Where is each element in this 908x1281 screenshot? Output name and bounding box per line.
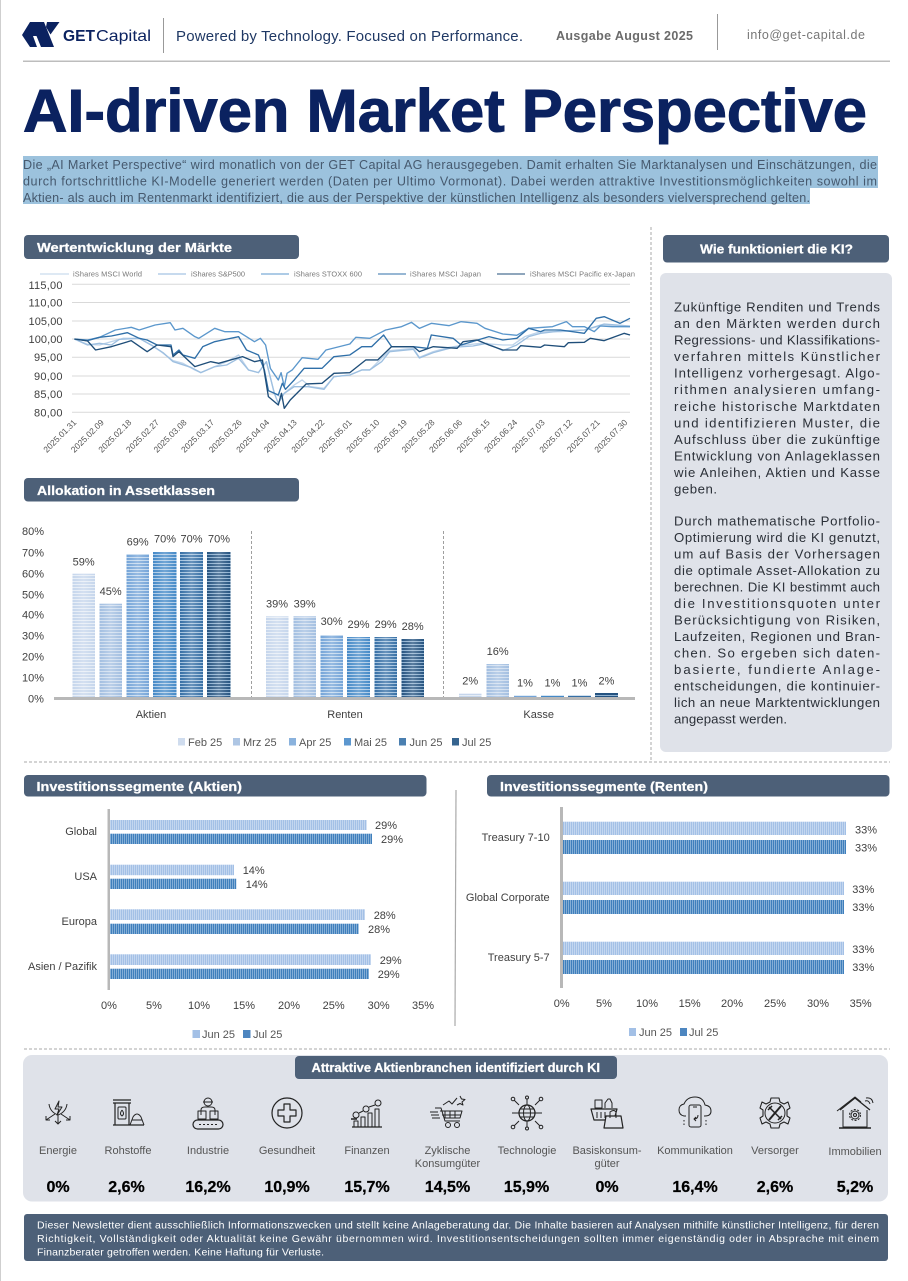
x axis ticks: 15% [233,1000,255,1012]
y axis percentages: 80% [22,526,44,538]
data labels: 1% [572,678,588,690]
y axis labels: 90,00 [34,371,62,383]
x axis ticks: 35% [412,1000,434,1012]
y axis percentages: 40% [22,609,44,621]
sector labels: Energie [39,1145,77,1157]
x axis ticks: 5% [146,1000,162,1012]
x axis dates: 2025.04.04 [234,417,271,454]
icon: cyclical consumer goods [430,1096,465,1128]
series: Jun 25 [563,822,846,955]
x axis dates: 2025.02.27 [124,417,161,454]
heading: Wie funktioniert die KI?: Wie funktioniert die KI? [700,242,853,256]
data labels [73,534,615,690]
chart legend: Mrz 25 [243,737,277,749]
paragraph 2: Optimierung wird die KI genutzt, [674,530,880,545]
sector labels: Technologie [498,1145,556,1157]
sector labels: Finanzen [344,1145,390,1157]
category labels [28,826,98,973]
icon: communication [679,1097,711,1127]
paragraph 2 [674,514,881,726]
series: Jul 25 [207,552,618,697]
data labels: 14% [243,865,265,877]
data labels: 14% [246,879,268,891]
sector percentages [46,1179,873,1196]
panel heading [295,1056,617,1079]
data labels: 2% [599,676,615,688]
panel heading: Attraktive Aktienbranchen identifiziert durch KI [312,1061,600,1075]
bar chart: bond segments [466,807,877,1039]
chart legend: Jul 25 [689,1027,718,1039]
bar chart: equity segments [28,809,434,1041]
heading: Investitionssegmente (Renten): Investitionssegmente (Renten) [500,779,708,794]
chart legend: Apr 25 [299,737,331,749]
x axis ticks: 20% [278,1000,300,1012]
data labels: 28% [374,910,396,922]
disclaimer: Finanzberater getroffen werden. Keine Haftung für Verluste. [37,1246,324,1258]
chart legend: Jun 25 [639,1027,672,1039]
x axis dates: 2025.04.13 [262,417,299,454]
sector labels: Industrie [187,1145,229,1157]
x axis ticks: 25% [323,1000,345,1012]
sector percentages: 0% [595,1179,619,1196]
sector percentages: 2,6% [108,1179,145,1196]
category labels: Kasse [523,709,554,721]
paragraph 1: an den Märkten werden durch [674,316,880,331]
series: Jul 25 [563,840,846,974]
x axis ticks: 25% [764,998,786,1010]
sector labels: Kommunikation [657,1145,733,1157]
paragraph 1: geben. [674,482,717,496]
contact e-mail: info@get-capital.de [747,28,865,42]
logo [22,22,151,47]
chart legend: iShares S&P500 [191,270,245,278]
logo: GET [63,28,95,45]
paragraph 1: reiche historische Marktdaten [674,399,880,414]
data labels: 29% [380,955,402,967]
data labels: 59% [73,556,95,568]
icon: health [272,1098,302,1128]
x axis dates: 2025.07.21 [565,417,602,454]
data labels: 16% [487,646,509,658]
heading: Investitionssegmente (Renten) [487,775,890,796]
x axis ticks: 0% [554,998,570,1010]
data labels: 39% [266,598,288,610]
y axis percentages: 0% [28,693,44,705]
sector labels: Immobilien [828,1146,882,1158]
x axis ticks: 30% [368,1000,390,1012]
sector percentages: 10,9% [264,1179,310,1196]
y axis percentages: 50% [22,589,44,601]
chart legend [40,270,635,278]
data labels: 2% [462,676,478,688]
heading: Investitionssegmente (Aktien) [24,775,426,796]
heading: Allokation in Assetklassen: Allokation in Assetklassen [37,483,215,498]
paragraph 2: berechnen. Die KI bestimmt auch [674,580,880,594]
icon: technology [511,1096,543,1130]
x axis ticks [554,998,872,1010]
data labels: 33% [852,902,875,914]
paragraph 2: basierte, fundierte Anlage- [674,662,880,677]
sector percentages: 15,7% [344,1179,390,1196]
bar chart: asset allocation [22,526,635,749]
tagline: Powered by Technology. Focused on Performance. [176,28,523,45]
disclaimer: Dieser Newsletter dient ausschließlich Informationszwecken und stellt keine Anlageberatung dar. Die Inhalte basieren auf Analysen mithilfe künstlicher Intelligenz, für deren [37,1220,879,1232]
icon: finance [351,1100,382,1127]
y axis percentages: 70% [22,547,44,559]
x axis ticks: 30% [807,998,829,1010]
sector labels: Gesundheit [259,1145,315,1157]
data labels: 70% [154,534,176,546]
sector labels: güter [594,1158,620,1170]
data labels: 70% [208,534,230,546]
y axis percentages [22,526,44,705]
sector percentages: 16,2% [185,1179,231,1196]
y axis percentages: 20% [22,651,44,663]
data labels: 28% [368,924,390,936]
data labels: 29% [378,969,400,981]
paragraph 2: um auf Basis der Vorhersagen [674,546,880,562]
category labels: USA [74,871,98,883]
chart legend: Jul 25 [462,737,491,749]
sector percentages: 2,6% [757,1179,793,1196]
y axis labels: 95,00 [34,352,62,364]
sector percentages: 16,4% [672,1179,718,1196]
category labels: Renten [327,709,363,721]
intro text [23,156,878,205]
x axis dates: 2025.07.03 [510,417,547,454]
x axis dates: 2025.06.15 [455,417,492,454]
category labels: Global [65,826,97,838]
data labels: 33% [852,884,875,896]
data labels: 29% [347,619,370,631]
data labels: 33% [852,962,875,974]
sector labels: Zyklische [425,1145,470,1157]
y axis percentages: 10% [22,672,44,684]
category labels: Treasury 5-7 [488,952,550,964]
chart legend: iShares MSCI Japan [410,270,481,278]
x axis dates: 2025.05.28 [399,417,437,454]
data labels [243,820,403,981]
panel: attractive sectors [23,1055,888,1202]
sector percentages: 0% [46,1179,70,1196]
heading: Investitionssegmente (Aktien): Investitionssegmente (Aktien) [36,779,242,794]
paragraph 1: Entwicklung von Anlageklassen [674,448,880,463]
x axis ticks: 20% [721,998,743,1010]
data labels: 30% [321,616,343,628]
header [22,14,890,62]
chart legend: Mai 25 [354,737,387,749]
sector labels: Versorger [751,1145,799,1157]
category labels: Europa [62,916,98,928]
series: Feb 25 [72,574,482,697]
chart legend: Feb 25 [188,737,222,749]
data labels: 29% [375,619,397,631]
icon: raw materials [113,1100,144,1125]
data labels: 70% [180,534,203,546]
heading: Wertentwicklung der Märkte: Wertentwicklung der Märkte [37,240,232,255]
y axis labels: 115,00 [28,280,62,292]
chart legend: iShares STOXX 600 [294,270,362,278]
data labels [852,824,877,974]
y axis labels: 100,00 [28,334,62,346]
heading: Wertentwicklung der Märkte [24,235,299,259]
intro text: durch fortschrittliche KI-Modelle generiert werden (Daten per Ultimo Vormonat). Dabei werden attraktive Investitionsmöglichkeiten sowohl im [23,174,877,188]
data labels: 28% [402,621,424,633]
category labels: Global Corporate [466,892,550,904]
y axis labels: 80,00 [34,408,62,420]
intro text: Die „AI Market Perspective“ wird monatlich von der GET Capital AG herausgegeben. Damit erhalten Sie Marktanalysen und Einschätzungen, die [23,158,877,172]
data lines [74,317,630,408]
chart legend: Jul 25 [253,1029,282,1041]
sector percentages: 5,2% [837,1179,873,1196]
data labels: 39% [294,598,316,610]
paragraph 2: Laufzeiten, Regionen und Bran- [674,629,880,644]
sector labels: Basiskonsum- [572,1145,642,1157]
icon: industry [193,1098,223,1129]
series: Mai 25 [153,552,564,697]
x axis dates: 2025.03.08 [151,417,189,454]
x axis dates: 2025.03.17 [179,417,216,454]
paragraph 1: Zukünftige Renditen und Trends [674,300,880,314]
data labels: 29% [375,820,397,832]
y axis labels: 85,00 [34,389,62,401]
chart legend [629,1027,718,1039]
series: Jul 25 [110,834,372,979]
data labels: 69% [127,536,149,548]
chart legend: iShares MSCI World [73,270,142,278]
sector percentages: 14,5% [425,1179,470,1196]
paragraph 1: und identifizieren Muster, die [674,415,880,430]
x axis dates: 2025.02.18 [96,417,134,454]
heading: Allokation in Assetklassen [24,478,299,502]
icon: consumer staples [591,1099,623,1128]
chart legend: Jun 25 [202,1029,235,1041]
paragraph 2: entscheidungen, die kontinuier- [674,678,880,694]
icon: utilities [760,1098,790,1128]
title: AI-driven Market Perspective [23,78,867,144]
sector labels [39,1145,882,1170]
paragraph 2: die optimale Asset-Allokation zu [674,563,880,578]
paragraph 2: chen. So ergeben sich daten- [674,646,880,660]
line chart: market performance [28,270,635,454]
x axis dates: 2025.05.19 [372,417,409,454]
series: Jun 25 [110,820,371,965]
data labels: 1% [545,678,561,690]
paragraph 2: angepasst werden. [674,712,787,726]
intro text: Aktien- als auch im Rentenmarkt identifiziert, die aus der Perspektive der künstlichen Intelligenz als besonders vielversprechend gelten. [23,191,810,205]
x axis dates: 2025.02.09 [69,417,106,454]
series: Jun 25 [180,552,591,697]
paragraph 2: Berücksichtigung von Risiken, [674,612,880,628]
x axis dates: 2025.05.10 [344,417,382,454]
x axis ticks: 5% [596,998,612,1010]
series: Mrz 25 [100,604,509,697]
x axis dates: 2025.06.06 [427,417,464,454]
y axis labels [28,280,62,420]
sector labels: Konsumgüter [415,1158,481,1170]
heading: Wie funktioniert die KI? [663,235,889,262]
paragraph 1: Intelligenz vorhergesagt. Algo- [674,366,880,381]
x axis dates: 2025.03.26 [207,417,244,454]
y axis labels: 110,00 [28,298,62,310]
x axis dates: 2025.07.30 [592,417,630,454]
data labels: 1% [517,678,533,690]
paragraph 1 [673,300,881,496]
data labels: 33% [855,842,877,854]
paragraph 1: verfahren mittels Künstlicher [674,349,881,364]
paragraph 2: lich an neue Marktentwicklungen [674,695,880,710]
chart legend [192,1029,282,1041]
sector percentages: 15,9% [504,1179,549,1196]
paragraph 1: wie Anleihen, Aktien und Kasse [673,465,880,480]
x axis dates: 2025.04.22 [289,417,327,454]
data labels: 29% [381,834,403,846]
category labels: Aktien [136,709,166,721]
data labels: 33% [855,824,877,836]
x axis dates: 2025.01.31 [41,417,79,454]
x axis dates [41,417,630,454]
y axis percentages: 30% [22,631,44,643]
paragraph 2: die Investitionsquoten unter [674,596,881,611]
chart legend: Jun 25 [410,737,443,749]
y axis labels: 105,00 [28,316,62,328]
category labels [136,709,554,721]
chart legend: iShares MSCI Pacific ex-Japan [530,270,635,278]
icon: energy [46,1101,70,1124]
x axis dates: 2025.05.01 [317,417,354,454]
paragraph 2: Durch mathematische Portfolio- [674,514,880,528]
category labels: Asien / Pazifik [28,961,98,973]
series: Apr 25 [126,554,536,697]
y axis percentages: 60% [22,568,44,580]
x axis dates: 2025.06.24 [482,417,519,454]
x axis ticks: 0% [101,1000,117,1012]
x axis ticks: 35% [850,998,872,1010]
x axis ticks: 15% [679,998,701,1010]
logo: Capital [96,28,151,45]
sector labels: Rohstoffe [105,1145,151,1157]
x axis ticks [101,1000,434,1012]
paragraph 1: Aufschluss über die zukünftige [674,432,880,447]
data labels: 45% [100,586,122,598]
data labels: 33% [852,944,875,956]
panel: how the AI works [660,273,892,752]
disclaimer: Richtigkeit, Vollständigkeit oder Aktualität keine Gewähr übernommen wird. Investitionsentscheidungen sollten immer eigenständig oder in Absprache mit einem [37,1233,879,1245]
icon: real estate [837,1097,873,1128]
x axis ticks: 10% [188,1000,210,1012]
disclaimer [24,1214,888,1261]
category labels: Treasury 7-10 [482,832,550,844]
x axis ticks: 10% [636,998,658,1010]
x axis dates: 2025.07.12 [537,417,575,454]
issue date: Ausgabe August 2025 [556,29,693,43]
paragraph 1: rithmen analysieren umfang- [674,382,880,397]
category labels [466,832,550,964]
paragraph 1: Regressions- und Klassifikations- [674,333,880,348]
chart legend [178,737,491,749]
